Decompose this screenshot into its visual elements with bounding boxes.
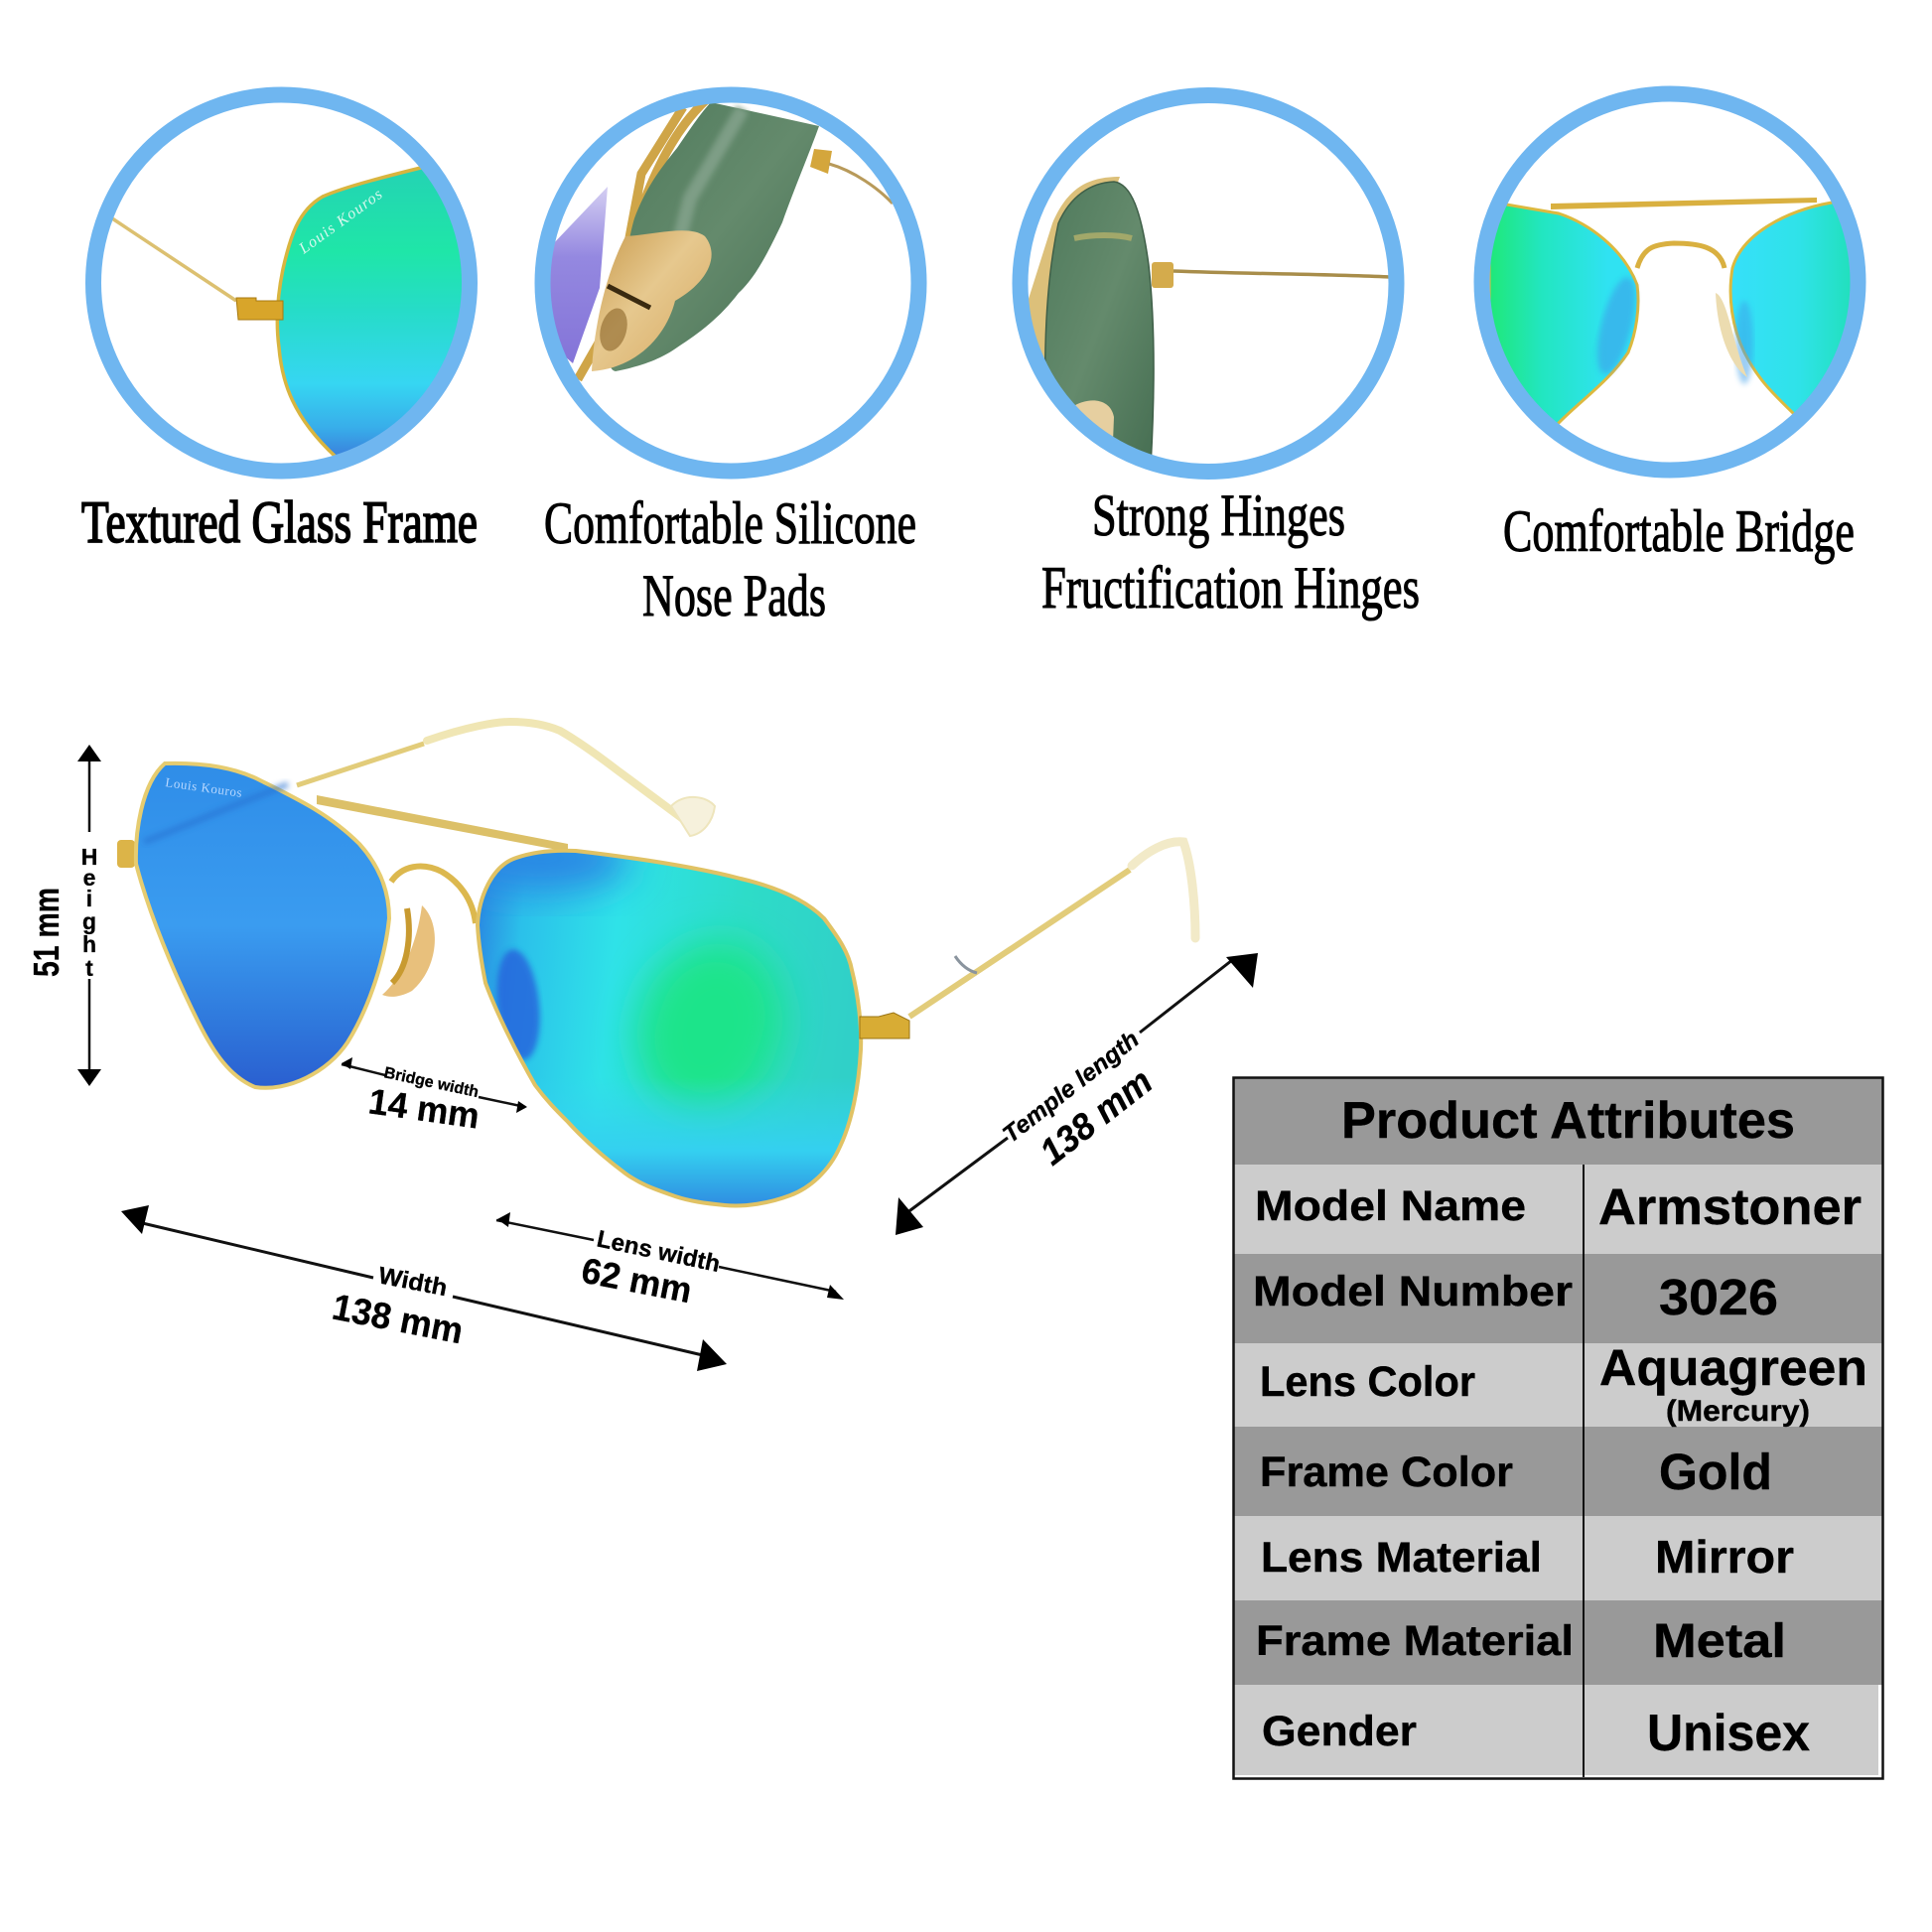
attribute names: Lens Color <box>1260 1358 1475 1406</box>
dimension: lens width <box>496 1212 844 1311</box>
gold frame part <box>578 99 707 379</box>
bridge <box>1637 243 1725 268</box>
dimension: temple length <box>896 953 1258 1235</box>
attribute names: Lens Material <box>1261 1534 1542 1582</box>
nose pad <box>382 905 435 997</box>
top blue sheen <box>492 852 647 912</box>
attribute names <box>1253 1182 1574 1755</box>
blue ring <box>542 95 919 471</box>
green glare <box>615 922 805 1133</box>
nose pad right <box>1716 293 1747 377</box>
right lens <box>1730 197 1857 415</box>
attribute values: Unisex <box>1647 1705 1810 1762</box>
hinge left <box>117 840 135 868</box>
near temple <box>909 870 1130 1017</box>
lens detail <box>277 164 477 457</box>
dimension: overall width <box>121 1205 727 1371</box>
caption: comfortable silicone nose pads: Nose Pads <box>642 563 826 628</box>
detail panel: comfortable bridge <box>1481 93 1859 471</box>
small nose pad <box>1075 400 1114 437</box>
dimension: temple length: 138 mm <box>1033 1060 1160 1173</box>
hinge knob <box>1152 262 1173 288</box>
knob and wire <box>810 149 832 174</box>
attribute values: 3026 <box>1659 1269 1778 1325</box>
caption: strong hinges: Strong Hinges <box>1092 483 1345 548</box>
table heading: Product Attributes <box>1341 1092 1795 1150</box>
attribute values: (Mercury) <box>1666 1395 1810 1428</box>
right lens <box>480 852 860 1203</box>
attribute names: Model Name <box>1255 1182 1526 1230</box>
attribute values: Metal <box>1653 1615 1786 1668</box>
table row backgrounds <box>1233 1077 1883 1775</box>
attribute names: Gender <box>1262 1708 1417 1755</box>
dimension: bridge width <box>342 1057 527 1137</box>
detail panel: nose pads <box>542 95 919 471</box>
temple wire <box>1173 271 1390 277</box>
right lens frame <box>478 851 861 1206</box>
attribute values: Armstoner <box>1598 1178 1862 1235</box>
dimension: height: t <box>85 955 93 981</box>
bridge <box>391 867 476 923</box>
dimension: overall width: 138 mm <box>329 1287 467 1351</box>
brand mark: Louis Kouros <box>165 774 243 800</box>
silicone nose pad <box>592 230 712 371</box>
detail panel: textured glass frame <box>93 95 477 471</box>
purple lens edge <box>549 187 608 363</box>
attribute names: Model Number <box>1253 1268 1573 1315</box>
dimension: temple length: Temple length <box>998 1026 1145 1149</box>
dimension: height: h <box>82 931 96 957</box>
hinge right <box>860 1013 909 1038</box>
far temple <box>297 744 424 785</box>
dimension: overall width: Width <box>376 1262 450 1302</box>
temple arm <box>112 218 236 301</box>
nose pad reflection <box>491 947 545 1062</box>
left lens <box>1489 202 1638 425</box>
dimension: bridge width: Bridge width <box>382 1064 481 1101</box>
table: product attributes <box>1233 1077 1883 1779</box>
dimension: height: i <box>86 886 92 911</box>
top bar <box>317 795 568 852</box>
dimension: lens width: 62 mm <box>578 1250 695 1311</box>
left lens <box>136 763 389 1088</box>
label: 51 mm: 51 mm <box>26 888 67 977</box>
dimension: height: e <box>83 865 95 891</box>
caption: strong hinges: Fructification Hinges <box>1041 555 1420 621</box>
gold frame edge <box>1029 177 1120 359</box>
near temple tip <box>1132 842 1195 938</box>
dimension: height <box>77 745 101 1086</box>
caption: comfortable silicone nose pads: Comfortable Silicone <box>544 490 916 556</box>
green lens <box>1045 182 1154 467</box>
dimension: bridge width: 14 mm <box>366 1080 483 1137</box>
dimension: lens width: Lens width <box>595 1225 723 1278</box>
attribute values: Mirror <box>1655 1531 1794 1583</box>
attribute values: Aquagreen <box>1599 1339 1867 1396</box>
detail panel: strong hinges <box>1021 95 1396 472</box>
far temple tip <box>671 797 715 836</box>
caption: comfortable silicone nose pads <box>544 490 916 628</box>
main sunglasses photo <box>117 722 1195 1211</box>
attribute values <box>1598 1178 1867 1762</box>
scratch mark <box>955 956 977 973</box>
blue ring <box>93 95 470 471</box>
left reflection <box>144 784 288 842</box>
top bar <box>1551 198 1817 209</box>
attribute names: Frame Color <box>1260 1449 1513 1496</box>
far temple clear tube <box>427 722 683 819</box>
blue ring <box>1481 93 1859 471</box>
caption: strong hinges <box>1041 483 1420 621</box>
hinge <box>236 298 283 320</box>
dimension: height: g <box>82 908 96 934</box>
attribute names: Frame Material <box>1256 1617 1574 1665</box>
bottom cyan-blue sheen <box>580 1084 854 1203</box>
dimension: height: H <box>81 844 97 870</box>
green lens <box>611 102 819 371</box>
caption: textured glass frame: Textured Glass Frame <box>81 489 478 555</box>
brand mark: Louis Kouros <box>296 186 386 258</box>
blue ring <box>1021 95 1396 472</box>
attribute values: Gold <box>1659 1444 1772 1500</box>
